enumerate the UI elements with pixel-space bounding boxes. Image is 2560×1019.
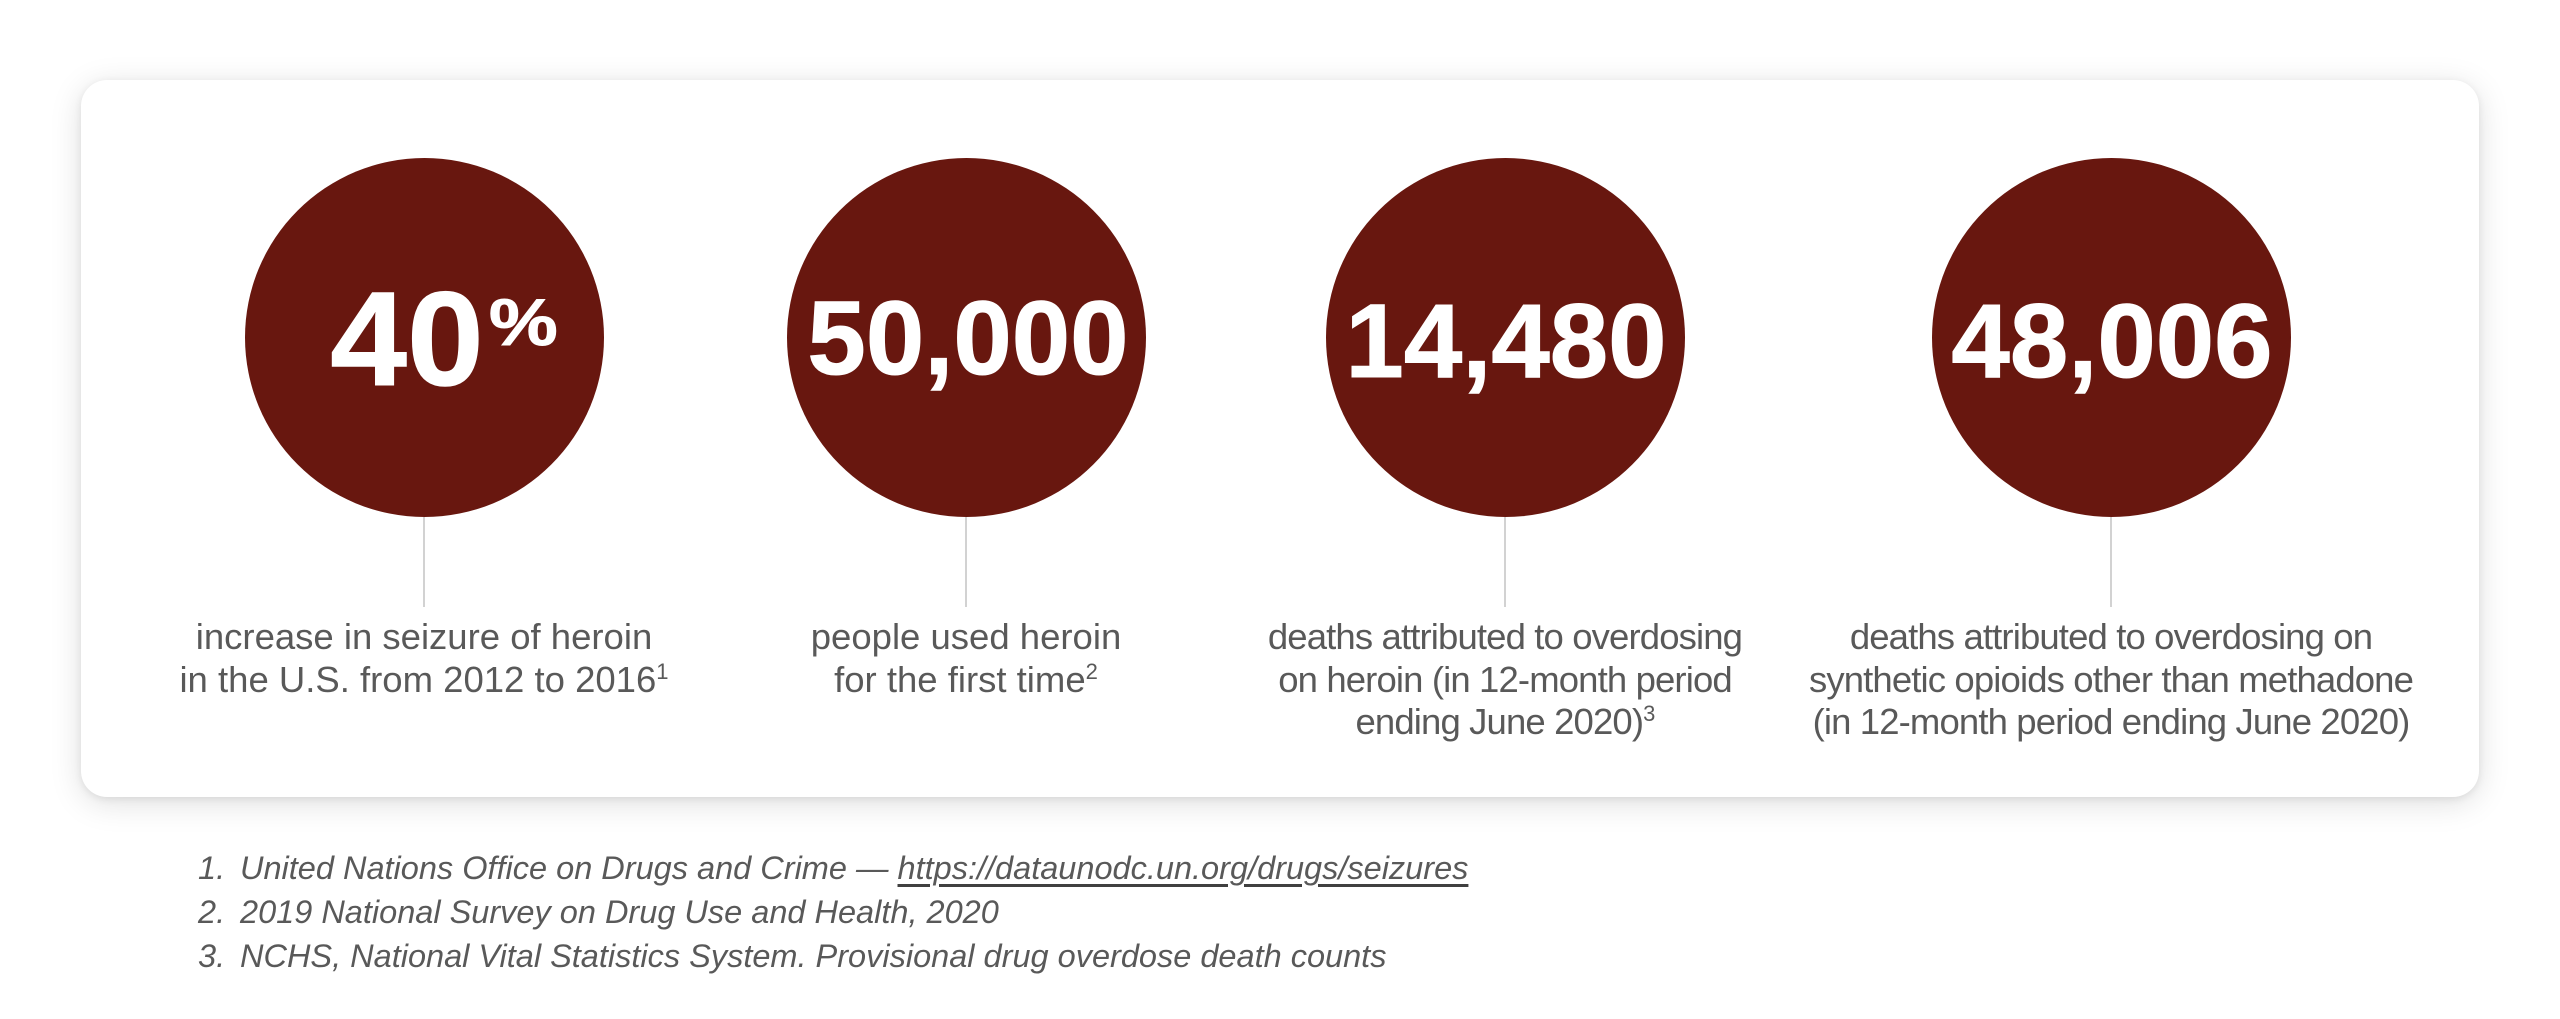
label: synthetic opioid deaths: (in 12-month period ending June 2020) [1813,701,2409,742]
connector line 4 [2110,517,2112,607]
circle: 40% [245,158,604,517]
stat: 40: 40 [330,265,484,414]
label: synthetic opioid deaths: synthetic opioids other than methadone [1809,658,2413,700]
circle: 48,006 [1932,158,2291,517]
stat: 50,000: 50,000 [807,280,1129,397]
panel: statistics card [81,80,2479,797]
label: heroin overdose deaths: deaths attributed to overdosing [1268,616,1742,657]
stat: 48,006: 48,006 [1951,283,2273,400]
connector line 3 [1504,517,1506,607]
footnotes [198,850,1468,974]
label: first-time users: for the first time2 [834,658,1098,700]
connector line 2 [965,517,967,607]
label: seizure increase: increase in seizure of heroin [196,616,652,657]
footnotes: 2019 National Survey on Drug Use and Health, 2020 [240,894,999,930]
footnotes: NCHS, National Vital Statistics System. Provisional drug overdose death counts [240,938,1386,974]
stat: percent sign: % [489,285,558,359]
label: heroin overdose deaths [1268,616,1742,742]
label: first-time users [811,616,1121,700]
label: seizure increase [179,616,669,700]
label: first-time users: people used heroin [811,616,1121,657]
footnotes: 3. [198,938,225,974]
circle: 14,480 [1326,158,1685,517]
label: heroin overdose deaths: ending June 2020)3 [1356,701,1654,742]
label: heroin overdose deaths: on heroin (in 12-month period [1278,658,1732,700]
label: synthetic opioid deaths [1809,616,2413,742]
connector line 1 [423,517,425,607]
footnotes: United Nations Office on Drugs and Crime — https://dataunodc.un.org/drugs/seizures [240,850,1468,886]
label: seizure increase: in the U.S. from 2012 to 20161 [179,658,669,700]
stat: 14,480: 14,480 [1345,283,1667,400]
footnotes: 1. [198,850,225,886]
footnotes: 2. [198,894,225,930]
label: synthetic opioid deaths: deaths attributed to overdosing on [1850,616,2372,657]
circle: 50,000 [787,158,1146,517]
